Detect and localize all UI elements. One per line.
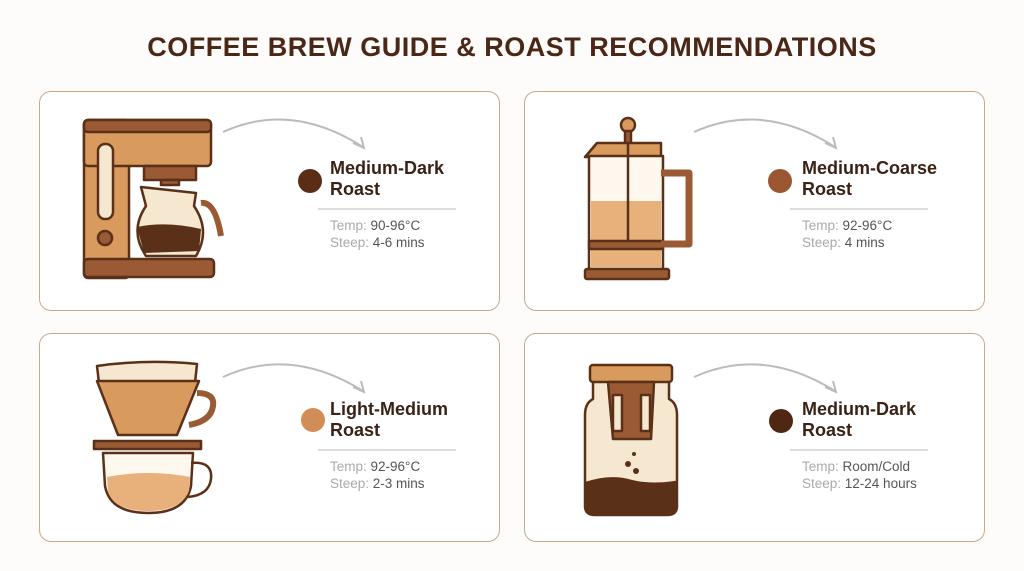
roast dot: [298, 169, 322, 193]
icon: coffee maker: [82, 118, 366, 280]
text: roast info: [790, 158, 937, 250]
roast dot: [769, 409, 793, 433]
arrow: [694, 364, 836, 392]
text: roast info: Roast: [330, 179, 380, 199]
text: roast info: Steep: 4 mins: [802, 234, 885, 250]
panel: drip coffee maker: [39, 91, 500, 311]
icon: cold brew jar: [584, 363, 838, 516]
text: roast info: [318, 158, 456, 250]
text: roast info: Temp: 92-96°C: [802, 218, 892, 232]
arrow: [223, 120, 364, 148]
text: roast info: Medium-Dark: [802, 399, 916, 419]
text: roast info: Temp: 90-96°C: [330, 218, 420, 232]
title: COFFEE BREW GUIDE & ROAST RECOMMENDATIONS: [147, 32, 877, 62]
text: roast info: Steep: 4-6 mins: [330, 234, 425, 250]
icon: pour over: [92, 360, 366, 514]
text: roast info: Temp: Room/Cold: [802, 458, 910, 474]
text: roast info: Medium-Coarse: [802, 158, 937, 178]
roast dot: [301, 408, 325, 432]
text: roast info: [790, 399, 928, 491]
panel: french press: [524, 91, 985, 311]
arrow: [223, 364, 364, 392]
text: roast info: Roast: [330, 420, 380, 440]
arrow: [694, 120, 836, 148]
icon: french press: [584, 116, 838, 280]
text: roast info: Roast: [802, 179, 852, 199]
text: roast info: [318, 399, 456, 491]
text: roast info: Roast: [802, 420, 852, 440]
text: roast info: Steep: 2-3 mins: [330, 476, 425, 490]
roast dot: [768, 169, 792, 193]
text: roast info: Temp: 92-96°C: [330, 458, 420, 474]
text: roast info: Steep: 12-24 hours: [802, 476, 917, 490]
text: roast info: Medium-Dark: [330, 158, 444, 178]
panel: cold brew: [524, 333, 985, 542]
panel: pour over: [39, 333, 500, 542]
text: roast info: Light-Medium: [330, 399, 448, 419]
